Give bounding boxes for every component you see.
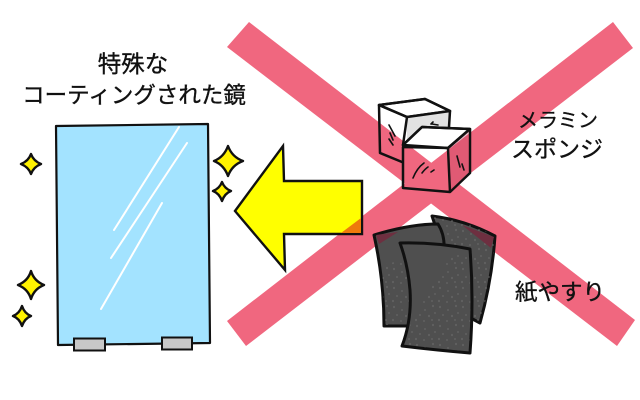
mirror clips [74,338,192,350]
mirror [56,124,210,350]
melamine sponges [379,99,470,192]
label: melamine sponge: メラミン [518,110,598,132]
title [22,51,246,108]
title: コーティングされた鏡 [22,83,246,108]
arrow [235,146,362,270]
front sheet [400,243,472,353]
front sponge [403,127,470,192]
sparkles [13,146,243,326]
back sponge [379,99,450,162]
sandpaper speckles [404,255,470,351]
sandpaper sheets [374,216,495,353]
left sheet [374,224,444,326]
label: melamine sponge: スポンジ [511,136,603,162]
label: melamine sponge [511,110,603,162]
mirror glare lines [101,127,187,309]
cross mark [227,22,635,346]
label: sandpaper: 紙やすり [515,280,605,305]
back sheet [432,216,495,323]
title: 特殊な [98,51,168,77]
